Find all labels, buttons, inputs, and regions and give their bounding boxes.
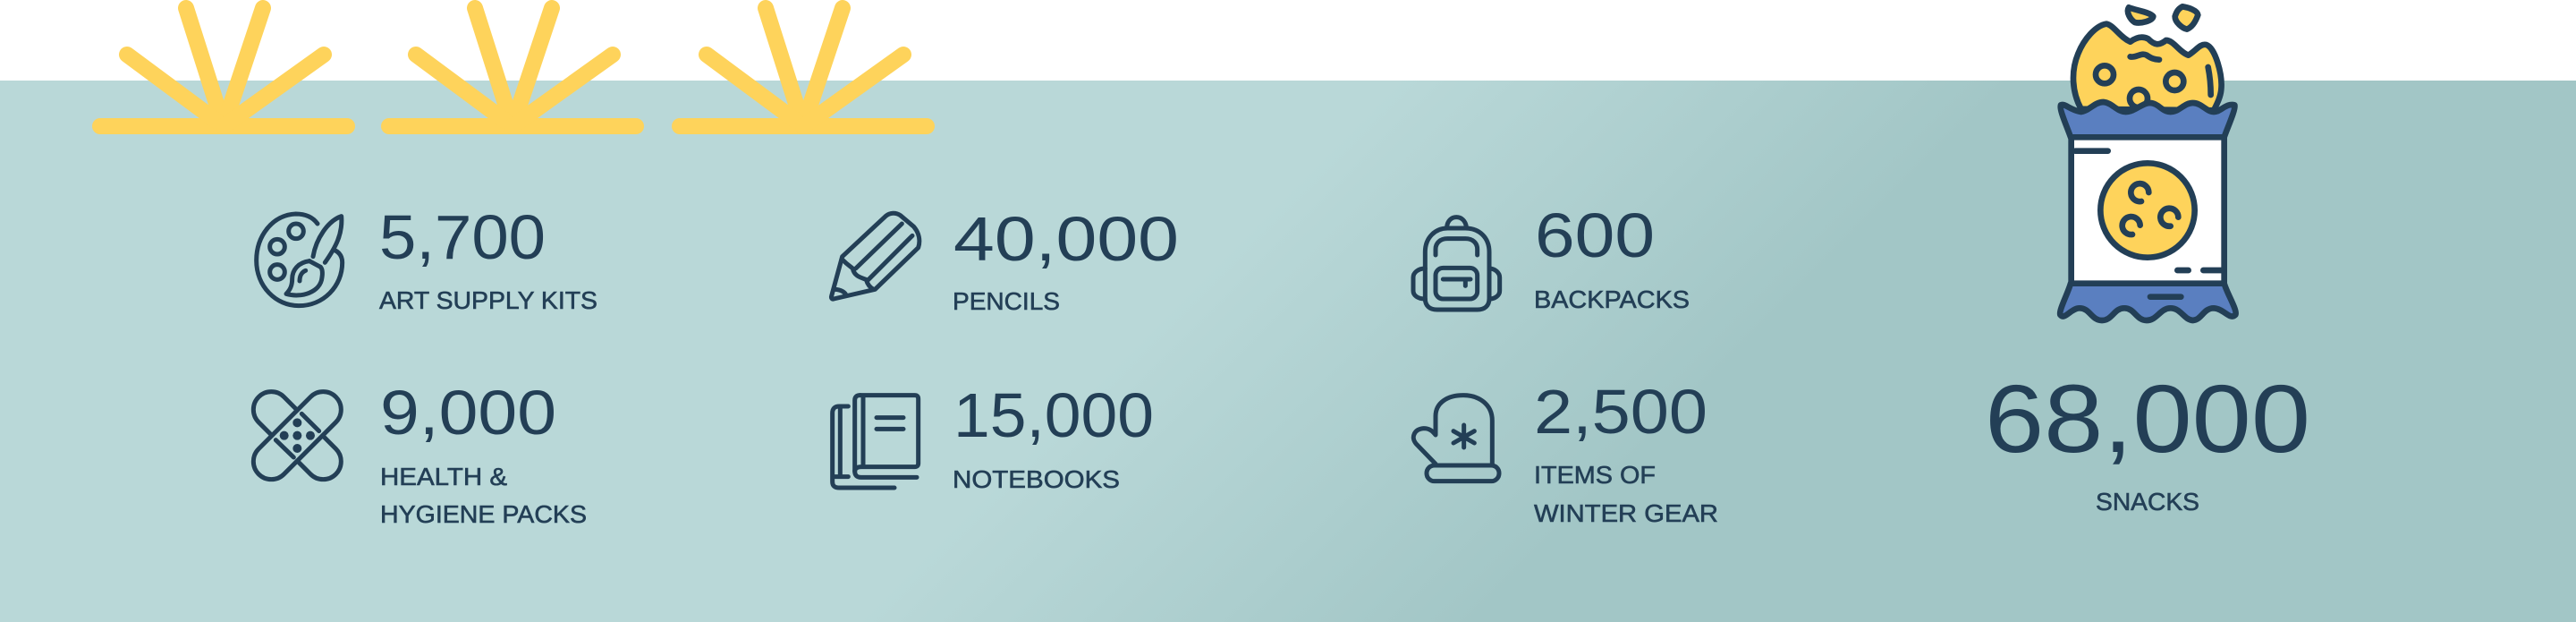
number: 68,000: 68,000 — [1985, 364, 2310, 473]
icon: crossed bandages — [246, 384, 349, 487]
icon: backpack — [1413, 217, 1500, 310]
label: items of winter gear: WINTER GEAR — [1534, 499, 1718, 527]
number: 9,000: 9,000 — [380, 378, 556, 447]
icon: notebooks — [833, 396, 919, 488]
icon: snack bag with cookie — [2060, 6, 2236, 320]
number: 40,000: 40,000 — [953, 204, 1179, 274]
icon: mitten — [1413, 396, 1499, 481]
stat: art supply kits — [257, 202, 597, 314]
stat: notebooks — [833, 380, 1154, 493]
label: health and hygiene packs: HEALTH & — [380, 463, 507, 490]
icon: palette and brush — [257, 214, 343, 306]
number: 600: 600 — [1535, 200, 1655, 270]
label: backpacks: BACKPACKS — [1534, 285, 1690, 313]
icon: pencil — [831, 213, 919, 299]
label: art supply kits: ART SUPPLY KITS — [379, 286, 597, 314]
label: notebooks: NOTEBOOKS — [953, 465, 1120, 493]
icon: sunburst 2 — [389, 8, 636, 126]
label: items of winter gear: ITEMS OF — [1534, 461, 1656, 489]
stat: pencils — [831, 204, 1179, 315]
stat: backpacks — [1413, 200, 1690, 313]
label: pencils: PENCILS — [953, 287, 1060, 315]
number: 2,500: 2,500 — [1534, 377, 1707, 447]
stat: snacks — [1985, 6, 2310, 515]
label: snacks: SNACKS — [2096, 488, 2199, 515]
icon: sunburst 3 — [680, 8, 927, 126]
label: health and hygiene packs — [380, 463, 587, 528]
stat: items of winter gear — [1413, 377, 1718, 527]
stat: health and hygiene packs — [246, 378, 587, 528]
label: items of winter gear — [1534, 461, 1718, 527]
number: 5,700: 5,700 — [379, 202, 546, 272]
icon: sunburst 1 — [100, 8, 347, 126]
label: health and hygiene packs: HYGIENE PACKS — [380, 500, 587, 528]
number: 15,000: 15,000 — [953, 380, 1154, 450]
